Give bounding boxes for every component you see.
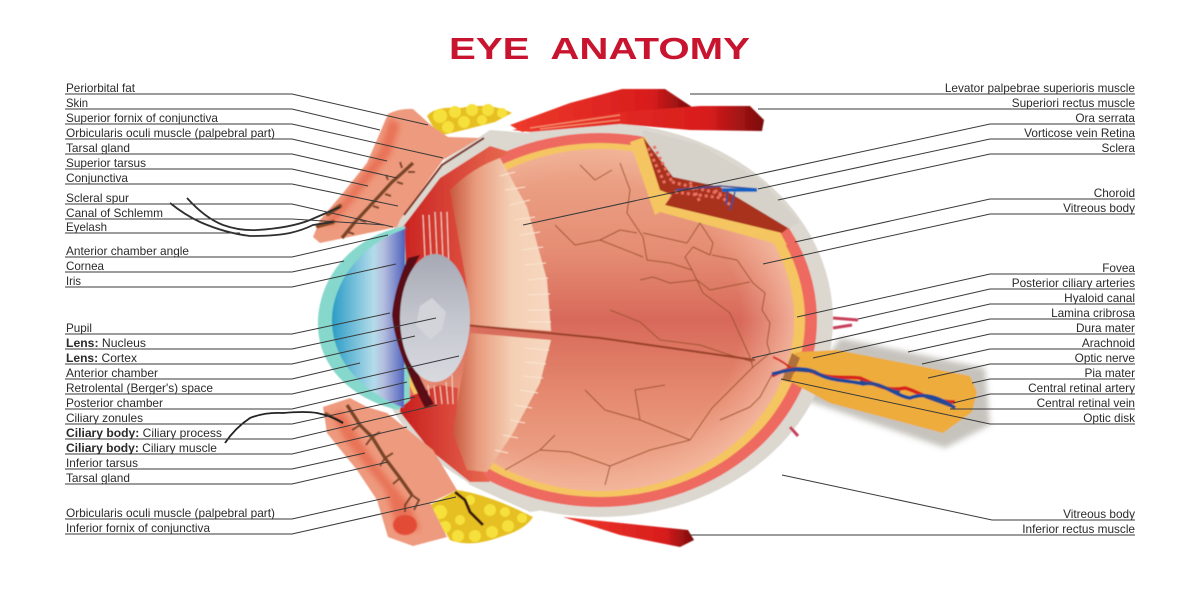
band ticks <box>495 172 551 453</box>
label: Vitreous body: Vitreous body <box>1063 201 1135 215</box>
label: Ora serrata: Ora serrata <box>1075 111 1135 125</box>
ciliary body lower <box>400 385 490 482</box>
label: Eyelash: Eyelash <box>66 220 107 234</box>
label: Pia mater: Pia mater <box>1085 366 1135 380</box>
optic nerve <box>790 350 977 433</box>
label: Periorbital fat: Periorbital fat <box>66 81 136 95</box>
label: Lens Nucleus <box>65 318 436 350</box>
label: Ciliary muscle <box>65 427 407 455</box>
optic disk <box>782 353 800 382</box>
retinal veins upper <box>555 163 770 368</box>
lower orbital fat <box>430 490 533 543</box>
label: Sclera <box>778 141 1135 200</box>
eyelash upper 2 <box>170 203 333 236</box>
retinal veins lower <box>505 367 773 485</box>
label: Anterior chamber: Anterior chamber <box>66 366 158 380</box>
label: Optic disk <box>781 379 1135 425</box>
sclera outer layer <box>367 123 833 517</box>
cornea <box>318 226 410 410</box>
label: Ciliary process: Ciliary body: Ciliary process <box>66 426 222 440</box>
label: Arachnoid: Arachnoid <box>1082 336 1135 350</box>
label: Superior rectus muscle: Superiori rectus muscle <box>1012 96 1135 110</box>
upper eyelid <box>313 109 484 243</box>
label: Arachnoid <box>922 336 1135 364</box>
label: Posterior chamber <box>65 382 407 410</box>
choroid layer <box>383 133 817 507</box>
label: Anterior chamber angle: Anterior chamber angle <box>66 244 189 258</box>
upper orbital fat <box>427 104 512 136</box>
label: Choroid <box>795 186 1135 242</box>
retina yellow layer <box>395 143 805 497</box>
label: Inferior fornix of conjunctiva: Inferior fornix of conjunctiva <box>66 521 210 535</box>
label: Pia mater <box>972 366 1135 383</box>
label: Hyaloid canal <box>752 291 1135 358</box>
label: Ciliary zonules: Ciliary zonules <box>66 411 143 425</box>
label: Lens Cortex <box>65 336 415 365</box>
sclera anterior band <box>395 130 620 512</box>
eye anatomy illustration <box>313 89 990 547</box>
ora serrata upper band <box>450 158 551 331</box>
label: Superior tarsus <box>65 156 368 186</box>
label: Hyaloid canal: Hyaloid canal <box>1064 291 1135 305</box>
vitreous edge highlight <box>406 149 794 491</box>
label: Conjunctiva <box>65 171 398 206</box>
label: Sclera: Sclera <box>1102 141 1135 155</box>
label: Inferior tarsus: Inferior tarsus <box>66 456 138 470</box>
label: Inferior fornix of conjunctiva <box>65 497 456 535</box>
label: Vorticose vein Retina: Vorticose vein Retina <box>1024 126 1135 140</box>
label: Lens Cortex: Lens: Cortex <box>66 351 137 365</box>
label: Scleral spur <box>65 191 393 227</box>
label: Lamina cribrosa: Lamina cribrosa <box>1051 306 1135 320</box>
zonules <box>423 212 453 404</box>
optic nerve vessels <box>772 357 955 408</box>
vitreous body <box>406 149 794 491</box>
label: Posterior chamber: Posterior chamber <box>66 396 163 410</box>
anterior chamber <box>332 228 408 408</box>
label: Orbicularis oculi muscle lower <box>65 497 390 520</box>
label: Tarsal gland: Tarsal gland <box>66 141 130 155</box>
label: Anterior chamber angle <box>65 235 388 258</box>
dissected choroid window with vessels <box>643 137 788 233</box>
superior rectus muscle <box>512 106 764 132</box>
title: EYE ANATOMY <box>449 31 750 66</box>
retina fold in window <box>630 137 787 245</box>
label: Retrolental space: Retrolental (Berger's) space <box>66 381 213 395</box>
label: Tarsal gland lower: Tarsal gland <box>66 471 130 485</box>
label: Cornea <box>65 259 344 273</box>
ciliary arteries <box>790 318 858 436</box>
lens nucleus <box>416 298 446 340</box>
label: Superior tarsus: Superior tarsus <box>66 156 146 170</box>
sclera window cut <box>643 130 800 228</box>
label: Vitreous body <box>763 201 1135 264</box>
label: Ora serrata <box>523 111 1135 225</box>
label: Choroid: Choroid <box>1094 186 1135 200</box>
label: Conjunctiva: Conjunctiva <box>66 171 128 185</box>
label: Ciliary zonules <box>65 397 415 425</box>
label: Ciliary muscle: Ciliary body: Ciliary muscle <box>66 441 217 455</box>
label: Inferior rectus muscle: Inferior rectus muscle <box>1022 522 1135 536</box>
label: Anterior chamber <box>65 363 360 380</box>
label: Posterior ciliary arteries: Posterior ciliary arteries <box>1012 276 1135 290</box>
label: Tarsal gland <box>65 141 397 178</box>
label: Superior fornix of conjunctiva: Superior fornix of conjunctiva <box>66 111 218 125</box>
label: Levator palpebrae superioris muscle: Levator palpebrae superioris muscle <box>945 81 1135 95</box>
label: Lens Nucleus: Lens: Nucleus <box>66 336 146 350</box>
label: Iris <box>65 264 396 288</box>
right labels <box>523 81 1135 536</box>
label: Vitreous body lower <box>782 475 1135 521</box>
label: Orbicularis oculi muscle upper: Orbicularis oculi muscle (palpebral part) <box>66 126 275 140</box>
label: Pupil: Pupil <box>66 321 92 335</box>
label: Inferior tarsus <box>65 453 365 470</box>
lens <box>400 254 470 382</box>
eyelash lower <box>225 412 343 443</box>
label: Central retinal vein: Central retinal vein <box>1037 396 1135 410</box>
label: Dura mater <box>908 321 1135 352</box>
label: Tarsal gland lower <box>65 462 388 485</box>
inferior rectus muscle <box>563 517 694 547</box>
label: Canal of Schlemm <box>65 206 385 225</box>
ora serrata lower band <box>453 333 551 472</box>
label: Cornea: Cornea <box>66 259 104 273</box>
label: Orbicularis oculi muscle lower: Orbicularis oculi muscle (palpebral part) <box>66 506 275 520</box>
label: Optic disk: Optic disk <box>1083 411 1135 425</box>
ciliary body upper <box>394 146 510 305</box>
label: Ciliary process <box>65 405 437 440</box>
label: Pupil <box>65 313 390 335</box>
eyelash upper 1 <box>187 198 340 230</box>
label: Vitreous body lower: Vitreous body <box>1063 507 1135 521</box>
label: Dura mater: Dura mater <box>1076 321 1135 335</box>
label: Fovea <box>797 261 1135 317</box>
label: Central retinal artery <box>953 381 1135 403</box>
iris <box>392 255 434 408</box>
label: Central retinal artery: Central retinal artery <box>1028 381 1135 395</box>
label: Lamina cribrosa <box>813 306 1135 358</box>
midline of eye <box>465 325 755 360</box>
label: Iris: Iris <box>66 274 81 288</box>
label: Retrolental space <box>65 356 459 395</box>
levator muscle <box>510 89 692 132</box>
label: Orbicularis oculi muscle upper <box>65 126 387 161</box>
left labels <box>65 81 459 535</box>
label: Superior fornix of conjunctiva <box>65 111 443 158</box>
label: Optic nerve: Optic nerve <box>1075 351 1135 365</box>
optic nerve shadow <box>800 338 990 448</box>
label: Optic nerve <box>928 351 1135 378</box>
label: Skin: Skin <box>66 96 88 110</box>
label: Periorbital fat <box>65 81 428 125</box>
label: Posterior ciliary arteries <box>858 276 1135 319</box>
label: Vorticose vein Retina <box>758 126 1135 189</box>
lower eyelid <box>323 398 483 546</box>
label: Skin <box>65 96 380 130</box>
label: Fovea: Fovea <box>1102 261 1135 275</box>
label: Scleral spur: Scleral spur <box>66 191 129 205</box>
label: Canal of Schlemm: Canal of Schlemm <box>66 206 163 220</box>
